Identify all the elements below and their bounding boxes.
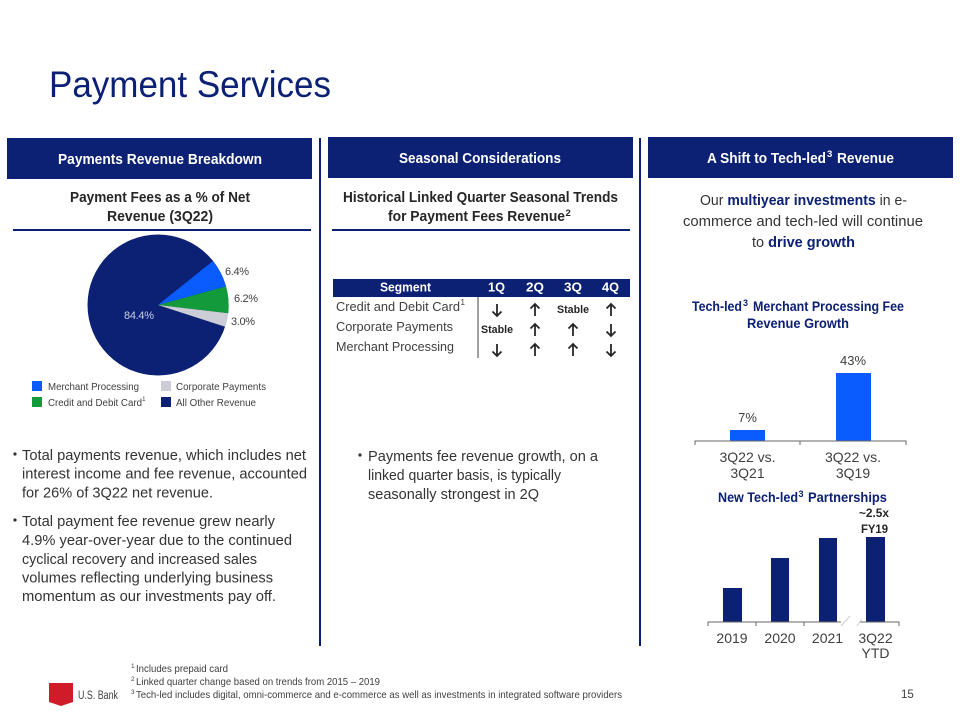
- subheading: historical trends: 2: [566, 208, 571, 219]
- seasonal trends table: 4Q: [602, 280, 619, 294]
- bullet: seasonal text: Payments fee revenue growth, on a: [368, 448, 599, 465]
- intro text: to drive growth: [752, 234, 855, 251]
- seasonal trends table: 1Q: [488, 280, 505, 294]
- subheading: historical trends: [332, 189, 630, 231]
- bullet: seasonal text: [358, 448, 599, 503]
- bullets: left text: for 26% of 3Q22 net revenue.: [22, 484, 213, 502]
- title: Payment Services: [49, 64, 331, 105]
- chart heading: new partnerships: 3: [798, 489, 804, 499]
- seasonal trends table: Credit and Debit Card: [336, 299, 460, 314]
- header: shift to tech-led: [648, 137, 953, 178]
- seasonal trends table: Stable: [481, 324, 513, 336]
- subheading: payment fees: Payment Fees as a % of Net: [70, 189, 250, 206]
- seasonal trends table: [333, 279, 630, 358]
- legend: Credit and Debit Card: [48, 397, 142, 409]
- legend: [32, 381, 266, 409]
- bullets: left text: interest income and fee revenue, accounted: [22, 466, 307, 482]
- trend arrows: [492, 304, 616, 356]
- seasonal trends table: 1: [460, 298, 466, 307]
- header: seasonal considerations: [328, 137, 633, 178]
- bar chart: fee revenue growth: 43%: [840, 353, 866, 368]
- bar chart: partnerships: YTD: [862, 645, 890, 661]
- intro text: Our multiyear investments in e-: [700, 192, 907, 209]
- seasonal trends table: 2Q: [526, 280, 544, 294]
- bullets: left text: cyclical recovery and increased sales: [22, 551, 257, 568]
- seasonal trends table: Merchant Processing: [336, 339, 454, 354]
- bullets: left text: 4.9% year-over-year due to the continued: [22, 532, 292, 549]
- bar chart: fee revenue growth: [695, 353, 906, 481]
- seasonal trends table: Stable: [557, 304, 589, 316]
- footnotes: Tech-led includes digital, omni-commerce and e-commerce as well as investments in integrated software providers: [136, 689, 622, 701]
- pie chart: 6.2%: [234, 293, 258, 305]
- intro text: [683, 192, 923, 251]
- pie chart: 6.4%: [225, 266, 249, 278]
- chart heading: merchant processing growth: Revenue Growth: [747, 315, 849, 331]
- legend: Corporate Payments: [176, 381, 266, 393]
- pie chart: 3.0%: [231, 316, 255, 328]
- bullets: left text: Total payment fee revenue grew nearly: [22, 513, 275, 530]
- callout: 2.5x FY19: FY19: [861, 522, 888, 536]
- chart heading: merchant processing growth: Tech-led: [692, 298, 742, 314]
- divider left: [319, 138, 321, 646]
- bar chart: partnerships: 3Q22: [858, 630, 893, 646]
- header: payments revenue breakdown: Payments Revenue Breakdown: [58, 152, 262, 168]
- bar chart: fee revenue growth: 3Q19: [836, 465, 870, 481]
- bar chart: fee revenue growth: 7%: [738, 410, 757, 425]
- legend: Merchant Processing: [48, 381, 139, 393]
- page number: 15: [901, 689, 914, 701]
- bar chart: partnerships: 2020: [764, 630, 796, 646]
- subheading: historical trends: for Payment Fees Revenue: [388, 208, 565, 225]
- seasonal trends table: 3Q: [564, 280, 582, 294]
- bullets: left text: momentum as our investments pay off.: [22, 588, 276, 605]
- panel: tech-led revenue: [648, 137, 953, 661]
- bullets: left text: Total payments revenue, which includes net: [22, 447, 307, 464]
- chart heading: new partnerships: [718, 489, 887, 505]
- subheading: payment fees: [13, 189, 311, 231]
- header: shift to tech-led: A Shift to Tech-led: [707, 151, 826, 167]
- header: shift to tech-led: 3: [827, 149, 832, 160]
- callout: 2.5x FY19: ~2.5x: [859, 506, 889, 520]
- footnotes: Linked quarter change based on trends from 2015 – 2019: [136, 676, 380, 688]
- bar chart: partnerships: 2019: [716, 630, 748, 646]
- subheading: payment fees: Revenue (3Q22): [107, 208, 213, 225]
- header: shift to tech-led: Revenue: [837, 151, 894, 167]
- subheading: historical trends: Historical Linked Quarter Seasonal Trends: [343, 189, 618, 206]
- logo: U.S. Bank: U.S. Bank: [78, 690, 118, 702]
- chart heading: merchant processing growth: [692, 298, 904, 331]
- legend: All Other Revenue: [176, 397, 256, 409]
- bullet: seasonal text: seasonally strongest in 2Q: [368, 486, 539, 503]
- bullets: left text: [13, 447, 307, 605]
- seasonal trends table: Segment: [380, 280, 432, 294]
- panel: seasonal considerations: [328, 137, 633, 503]
- chart heading: merchant processing growth: Merchant Processing Fee: [753, 298, 904, 314]
- bar chart: fee revenue growth: 3Q21: [730, 465, 765, 481]
- chart heading: new partnerships: Partnerships: [808, 489, 887, 505]
- callout: 2.5x FY19: [859, 506, 889, 536]
- footnotes: 2: [131, 676, 135, 683]
- bar chart: partnerships: 2021: [812, 630, 843, 646]
- bar chart: fee revenue growth: 3Q22 vs.: [825, 449, 881, 465]
- legend: 1: [142, 396, 146, 403]
- footnotes: [131, 663, 622, 701]
- footnotes: 3: [131, 689, 135, 696]
- panel: payments revenue breakdown: [7, 138, 312, 605]
- bar chart: fee revenue growth: 3Q22 vs.: [719, 449, 776, 465]
- bullet: seasonal text: linked quarter basis, is typically: [368, 467, 561, 484]
- chart heading: new partnerships: New Tech-led: [718, 489, 798, 505]
- pie chart: [88, 234, 258, 376]
- header: seasonal considerations: Seasonal Considerations: [399, 151, 561, 167]
- footnotes: 1: [131, 663, 135, 670]
- logo: U.S. Bank: [49, 683, 118, 706]
- intro text: commerce and tech-led will continue: [683, 213, 923, 230]
- footnotes: Includes prepaid card: [136, 663, 228, 675]
- pie chart: 84.4%: [124, 310, 154, 322]
- bar chart: partnerships: [708, 537, 899, 661]
- seasonal trends table: Corporate Payments: [336, 319, 453, 334]
- divider right: [639, 138, 641, 646]
- header: payments revenue breakdown: [7, 138, 312, 179]
- bullets: left text: volumes reflecting underlying business: [22, 570, 273, 586]
- chart heading: merchant processing growth: 3: [743, 298, 748, 308]
